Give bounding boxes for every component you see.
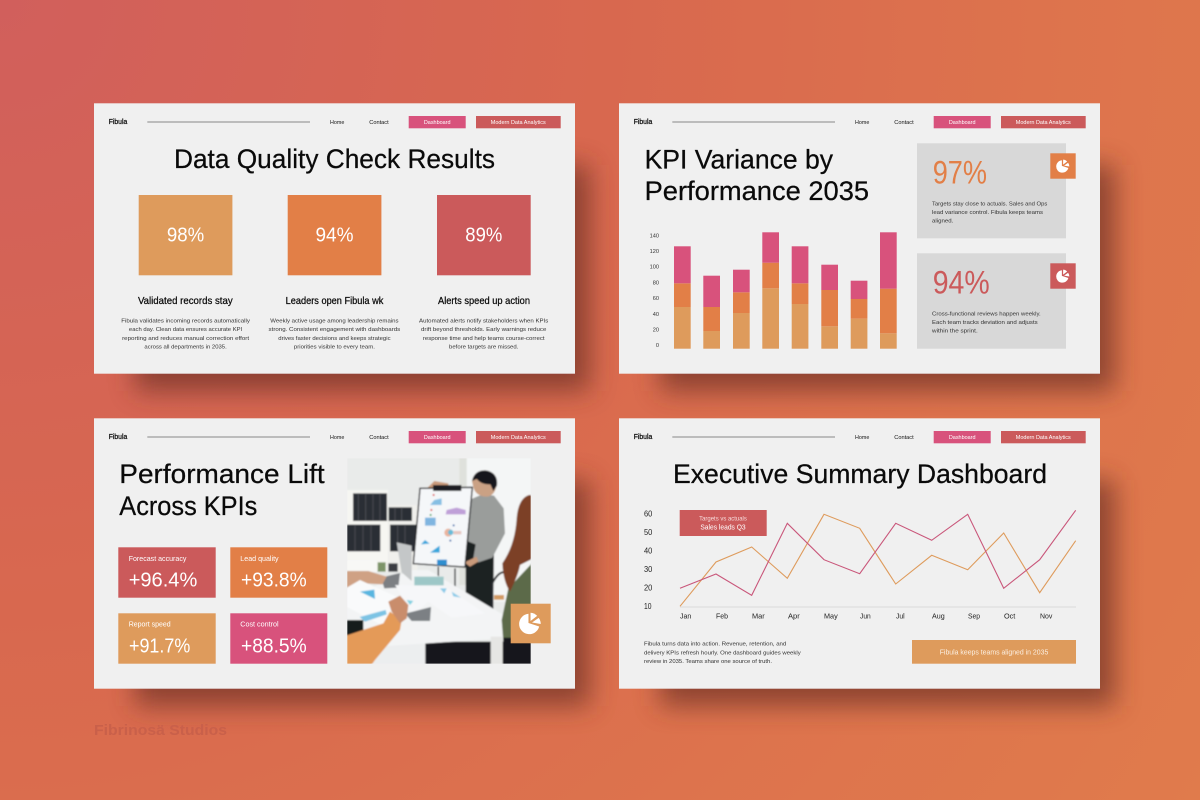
KPI card: lead quality: Lead quality <box>240 554 279 563</box>
navigation bar: Dashboard <box>424 120 451 126</box>
navigation bar: Fibula <box>634 432 652 441</box>
shelves <box>348 490 388 571</box>
y axis labels: 20 <box>644 584 653 592</box>
column text: leaders open Fibula: drives faster decisions and keeps strategic <box>278 336 391 342</box>
navigation bar <box>109 116 561 128</box>
stacked bar chart <box>650 232 897 349</box>
card: 94%: Each team tracks deviation and adjusts <box>932 320 1038 326</box>
icon: pie chart <box>1050 153 1076 179</box>
x axis labels <box>680 611 1053 620</box>
icon: pie chart badge <box>511 604 551 643</box>
column text: alerts speed up action: Automated alerts notify stakeholders when KPIs <box>419 318 549 324</box>
navigation bar: Home <box>855 435 869 441</box>
table <box>348 570 502 645</box>
y axis labels: 40 <box>644 546 653 556</box>
callout: teams aligned: Fibula keeps teams aligned in 2035 <box>940 648 1048 657</box>
whiteboard <box>413 487 472 567</box>
line chart <box>644 510 1076 620</box>
navigation bar: Dashboard <box>949 120 976 126</box>
column text: validated records: each day. Clean data ensures accurate KPI <box>129 327 243 333</box>
title: Across KPIs <box>119 491 257 521</box>
navigation bar: Dashboard <box>424 435 451 441</box>
column text: alerts speed up action: Alerts speed up action <box>438 295 530 307</box>
y axis labels: 60 <box>653 296 659 302</box>
navigation bar <box>109 431 561 443</box>
stat card: 98%: 98% <box>167 224 204 247</box>
column text: validated records: Fibula validates incoming records automatically <box>121 318 250 324</box>
card: 97%: lead variance control. Fibula keeps teams <box>932 210 1043 216</box>
column text: leaders open Fibula: Leaders open Fibula wk <box>286 295 384 307</box>
y axis labels: 120 <box>650 249 659 255</box>
y axis labels: 0 <box>656 343 659 349</box>
navigation bar: Contact <box>894 120 914 126</box>
title: Data Quality Check Results <box>174 144 495 174</box>
card: 94%: within the sprint. <box>931 329 978 335</box>
x axis labels: Jan <box>680 611 691 620</box>
column text: validated records <box>121 295 250 350</box>
y axis labels: 30 <box>644 565 653 574</box>
card: 97% <box>917 143 1076 238</box>
x axis labels: Nov <box>1040 611 1053 620</box>
KPI card: report speed <box>118 613 216 664</box>
navigation bar: Fibula <box>109 117 127 126</box>
woman <box>500 564 531 642</box>
KPI card: lead quality <box>230 547 327 598</box>
KPI card: lead quality: +93.8% <box>241 569 307 592</box>
orange sleeve <box>347 611 402 664</box>
summary text <box>644 642 801 665</box>
navigation bar: Fibula <box>634 117 652 126</box>
navigation bar: Modern Data Analytics <box>491 435 546 441</box>
KPI card: forecast accuracy: +96.4% <box>129 569 197 592</box>
icon: pie chart <box>1050 263 1076 289</box>
stat card: 94%: 94% <box>316 224 354 247</box>
KPI card: cost control: Cost control <box>240 620 279 629</box>
card: 94% <box>917 253 1076 349</box>
navigation bar: Modern Data Analytics <box>1016 435 1071 441</box>
photo: team reviewing charts at whiteboard <box>347 458 531 664</box>
y axis labels <box>644 510 653 611</box>
x axis labels: Mar <box>752 611 765 620</box>
x axis labels: Jul <box>896 611 905 620</box>
navigation bar: Dashboard <box>949 435 976 441</box>
laptop <box>397 542 412 581</box>
KPI card: cost control: +88.5% <box>241 634 307 657</box>
callout: targets vs actuals: Sales leads Q3 <box>700 522 746 532</box>
panel: performance lift <box>94 418 575 689</box>
chair <box>492 572 504 608</box>
watermark: Fibrinosä Studios <box>94 723 227 739</box>
callout: targets vs actuals: Targets vs actuals <box>699 516 747 522</box>
easel legs <box>438 567 455 588</box>
y axis labels: 40 <box>653 312 659 318</box>
callout: teams aligned <box>912 640 1076 664</box>
title: Executive Summary Dashboard <box>673 459 1047 489</box>
x axis labels: Oct <box>1004 611 1016 620</box>
column text: validated records: reporting and reduces manual correction effort <box>122 336 250 342</box>
x axis labels: Apr <box>788 611 800 620</box>
x axis labels: Sep <box>968 611 980 620</box>
column text: validated records: across all departments in 2035. <box>144 344 227 350</box>
summary text: Fibula turns data into action. Revenue, retention, and <box>644 642 786 648</box>
papers <box>347 579 374 599</box>
navigation bar <box>634 116 1086 128</box>
summary text: delivery KPIs refresh hourly. One dashboard guides weekly <box>644 650 801 656</box>
title: KPI Variance by <box>645 144 834 174</box>
column text: leaders open Fibula <box>269 295 400 350</box>
column text: leaders open Fibula: priorities visible to every team. <box>294 344 375 350</box>
KPI card: report speed: +91.7% <box>129 634 190 657</box>
card: 97%: Targets stay close to actuals. Sales and Ops <box>932 201 1048 207</box>
panel: executive summary <box>619 418 1100 689</box>
column text: validated records: Validated records stay <box>138 295 233 307</box>
x axis labels: Jun <box>860 611 871 620</box>
y axis labels: 80 <box>653 280 659 286</box>
title <box>119 459 325 521</box>
hands <box>347 570 387 588</box>
navigation bar: Contact <box>894 435 914 441</box>
y axis labels: 60 <box>644 510 653 518</box>
column text: leaders open Fibula: Weekly active usage among leadership remains <box>270 318 399 324</box>
navigation bar: Home <box>330 120 344 126</box>
x axis labels: Feb <box>716 611 728 620</box>
title <box>645 144 869 206</box>
navigation bar: Contact <box>369 435 389 441</box>
callout: targets vs actuals <box>680 510 767 536</box>
navigation bar <box>634 431 1086 443</box>
column text: alerts speed up action: response time and help teams course-correct <box>423 336 545 342</box>
y axis labels <box>650 233 659 349</box>
card: 94%: 94% <box>933 264 990 300</box>
stat card: 98% <box>139 195 232 275</box>
navigation bar: Home <box>330 435 344 441</box>
y axis labels: 140 <box>650 233 659 239</box>
column text: alerts speed up action: before targets are missed. <box>449 344 519 350</box>
stat card: 89%: 89% <box>465 224 502 247</box>
card: 94%: Cross-functional reviews happen weekly. <box>932 311 1041 317</box>
KPI card: report speed: Report speed <box>129 620 171 629</box>
column text: alerts speed up action <box>419 295 549 350</box>
KPI card: cost control <box>230 613 327 664</box>
x axis labels: May <box>824 611 838 620</box>
panel shadows <box>135 165 1115 706</box>
title: Performance Lift <box>119 459 325 489</box>
y axis labels: 50 <box>644 528 653 537</box>
floor below table <box>424 640 505 664</box>
KPI card: forecast accuracy: Forecast accuracy <box>129 554 187 563</box>
stat card: 89% <box>437 195 531 275</box>
KPI card: forecast accuracy <box>118 547 216 598</box>
panel: data quality check results <box>94 103 575 374</box>
column text: alerts speed up action: drift beyond thresholds. Early warnings reduce <box>421 327 546 333</box>
y axis labels: 100 <box>650 265 659 271</box>
navigation bar: Home <box>855 120 869 126</box>
panel: KPI variance <box>619 103 1100 374</box>
y axis labels: 10 <box>644 602 652 611</box>
column text: leaders open Fibula: strong. Consistent engagement with dashboards <box>269 327 400 333</box>
card: 97%: 97% <box>933 154 987 190</box>
summary text: review in 2035. Teams share one source of truth. <box>644 659 772 665</box>
man <box>466 540 494 612</box>
card: 97%: aligned. <box>932 219 954 225</box>
stat card: 94% <box>288 195 381 275</box>
navigation bar: Modern Data Analytics <box>1016 120 1071 126</box>
navigation bar: Modern Data Analytics <box>491 120 546 126</box>
x axis labels: Aug <box>932 611 945 620</box>
navigation bar: Fibula <box>109 432 127 441</box>
title: Performance 2035 <box>645 176 869 206</box>
navigation bar: Contact <box>369 120 389 126</box>
y axis labels: 20 <box>653 328 659 334</box>
